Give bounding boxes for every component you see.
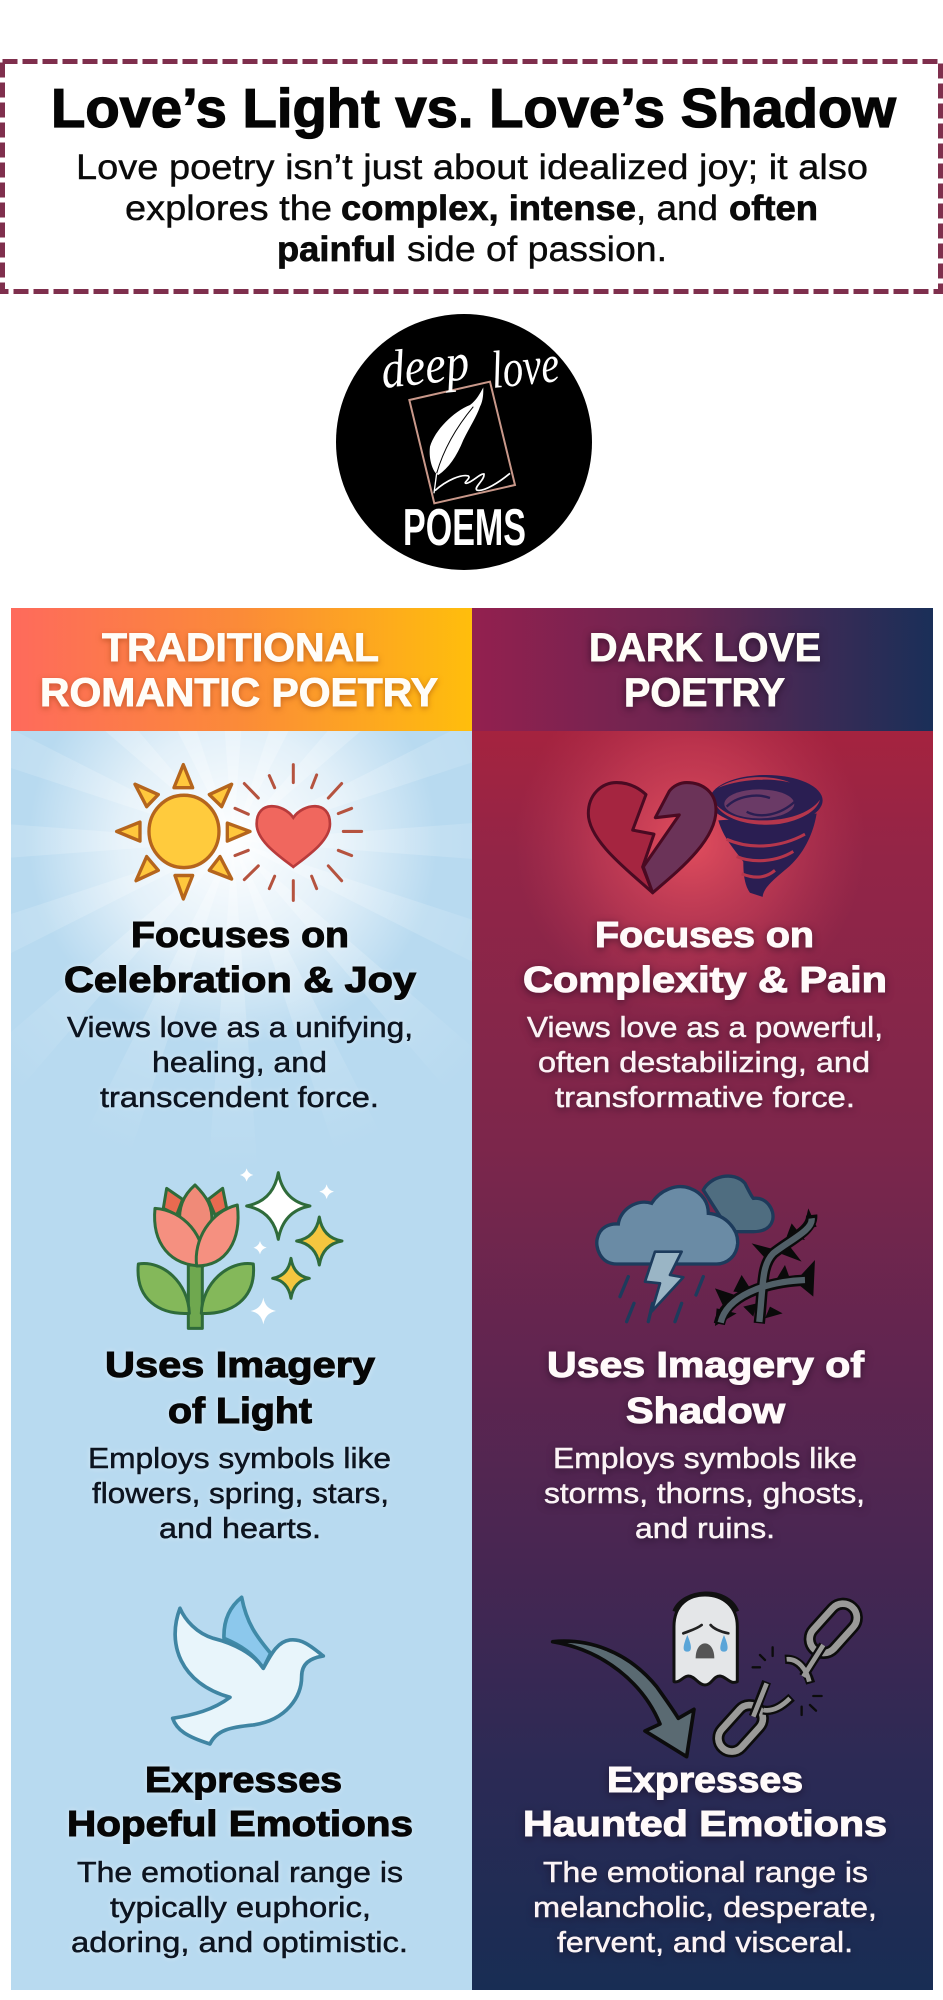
text block: complexity and pain: Focuses on <box>595 914 814 955</box>
header: traditional romantic poetry: TRADITIONAL <box>102 626 379 670</box>
text block: imagery of light: and hearts. <box>159 1513 321 1545</box>
icon: storm cloud and thorns <box>597 1176 817 1326</box>
text block: complexity and pain: Complexity & Pain <box>523 959 887 1000</box>
text block: imagery of shadow: Uses Imagery of <box>547 1344 865 1385</box>
text block: haunted emotions: Expresses <box>607 1759 803 1800</box>
text block: imagery of shadow <box>544 1344 865 1545</box>
subtitle: , and <box>636 189 718 228</box>
text block: haunted emotions: fervent, and visceral. <box>557 1927 853 1959</box>
header: traditional romantic poetry: ROMANTIC POETRY <box>40 671 438 715</box>
subtitle: side of passion. <box>407 230 667 269</box>
text block: haunted emotions: Haunted Emotions <box>523 1803 887 1844</box>
text block: complexity and pain: transformative force. <box>555 1082 855 1114</box>
subtitle <box>76 148 868 269</box>
text block: imagery of light <box>88 1344 391 1545</box>
text block: hopeful emotions: typically euphoric, <box>110 1892 371 1924</box>
text block: imagery of shadow: Shadow <box>626 1390 786 1431</box>
icon: dove <box>173 1597 323 1744</box>
text block: complexity and pain: Views love as a powerful, <box>527 1012 883 1044</box>
text block: complexity and pain <box>523 914 887 1114</box>
text block: hopeful emotions: adoring, and optimistic. <box>71 1927 408 1959</box>
text block: imagery of light: Employs symbols like <box>88 1443 391 1475</box>
title panel <box>2 62 940 292</box>
header: dark love poetry: DARK LOVE <box>589 626 821 670</box>
subtitle: complex, intense <box>341 189 636 228</box>
text block: imagery of shadow: storms, thorns, ghosts, <box>544 1478 865 1510</box>
logo: deep love poems: love <box>488 335 562 400</box>
text block: haunted emotions: melancholic, desperate, <box>533 1892 877 1924</box>
panel: traditional romantic poetry <box>11 731 472 1990</box>
subtitle: Love poetry isn’t just about idealized joy; it also <box>76 148 868 187</box>
text block: hopeful emotions: Hopeful Emotions <box>67 1803 413 1844</box>
text block: celebration and joy: Views love as a unifying, <box>67 1012 413 1044</box>
text block: imagery of shadow: Employs symbols like <box>553 1443 857 1475</box>
text block: imagery of light: of Light <box>168 1390 312 1431</box>
icon: arrow, ghost and broken chain <box>553 1594 863 1757</box>
text block: complexity and pain: often destabilizing, and <box>538 1047 870 1079</box>
text block: hopeful emotions: The emotional range is <box>77 1857 403 1889</box>
icon: broken heart and tornado <box>588 775 823 897</box>
text block: haunted emotions: The emotional range is <box>543 1857 868 1889</box>
header: dark love poetry <box>472 608 933 731</box>
text block: celebration and joy: transcendent force. <box>100 1082 379 1114</box>
header: dark love poetry: POETRY <box>624 671 785 715</box>
logo: deep love poems: deep <box>378 333 472 400</box>
subtitle: explores the <box>125 189 332 228</box>
logo: deep love poems <box>336 314 592 570</box>
text block: hopeful emotions <box>67 1759 413 1959</box>
header: traditional romantic poetry <box>11 608 472 731</box>
logo: deep love poems: POEMS <box>403 499 526 557</box>
text block: hopeful emotions: Expresses <box>145 1759 342 1800</box>
text block: imagery of shadow: and ruins. <box>635 1513 775 1545</box>
text block: celebration and joy <box>64 914 416 1114</box>
text block: celebration and joy: Celebration & Joy <box>64 959 416 1000</box>
text block: haunted emotions <box>523 1759 887 1959</box>
text block: celebration and joy: healing, and <box>152 1047 327 1079</box>
panel: dark love poetry <box>472 731 933 1990</box>
icon: sun and radiant heart <box>117 765 362 900</box>
title: Love’s Light vs. Love’s Shadow <box>51 77 896 139</box>
text block: celebration and joy: Focuses on <box>131 914 349 955</box>
text block: imagery of light: flowers, spring, stars, <box>92 1478 389 1510</box>
text block: imagery of light: Uses Imagery <box>105 1344 375 1385</box>
subtitle: often <box>729 189 818 228</box>
icon: tulip and stars <box>138 1168 342 1328</box>
subtitle: painful <box>277 230 396 269</box>
